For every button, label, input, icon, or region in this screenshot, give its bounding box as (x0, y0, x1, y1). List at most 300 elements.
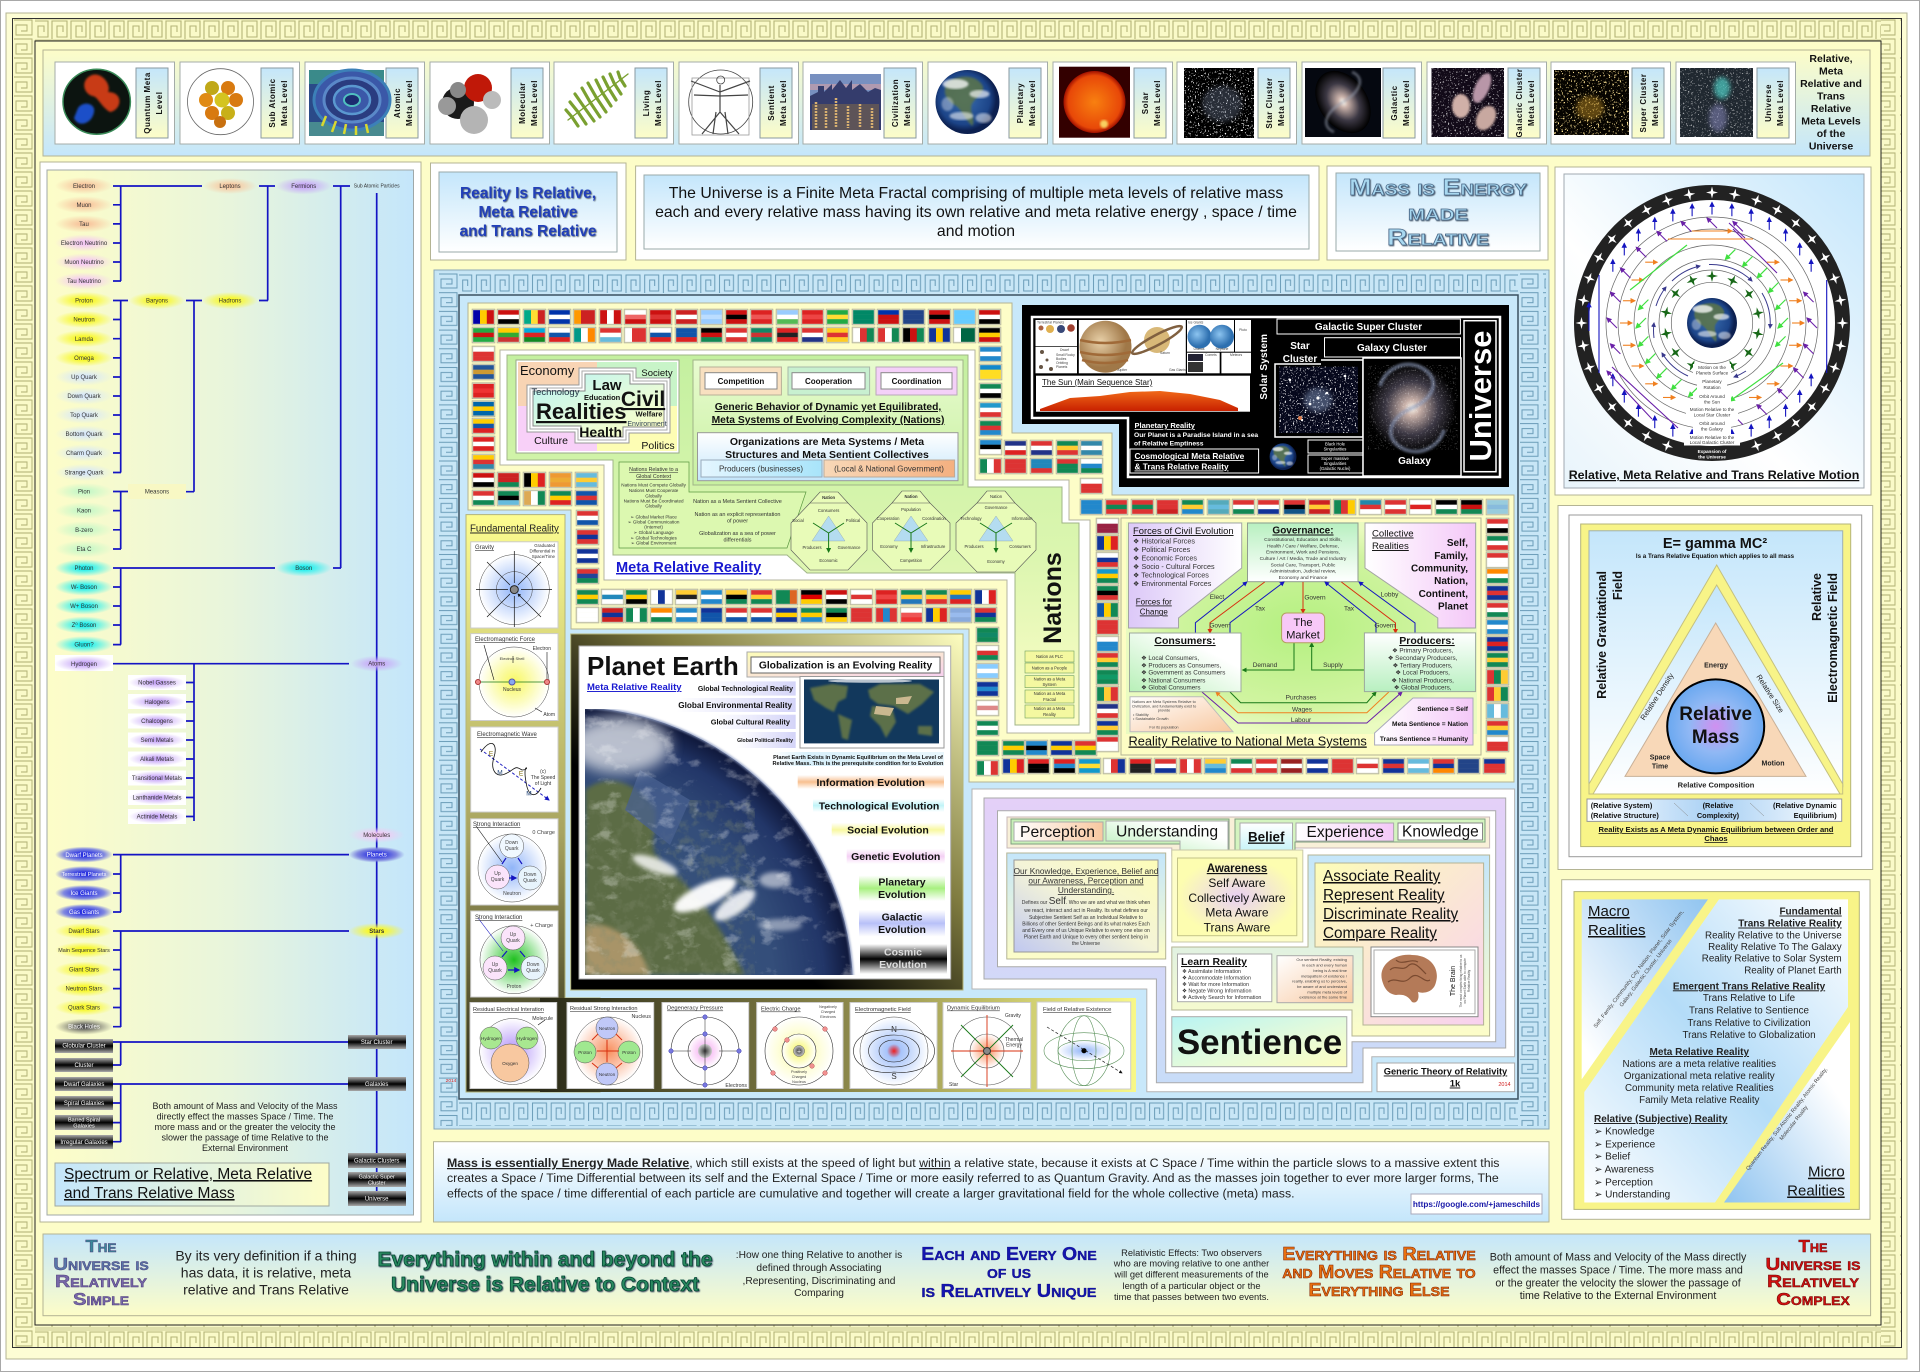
icon: city (810, 74, 881, 130)
column of flags: market left (1096, 518, 1119, 752)
relative mass circle: Relative (1679, 704, 1752, 725)
card: residual electrical interaction: Hydrogen (481, 1036, 501, 1041)
meta level label text: Super Cluster (1639, 74, 1648, 132)
nation meaning boxes: Nation as a Meta (1034, 706, 1066, 711)
subjective reality list: ➢ Experience (1594, 1139, 1656, 1150)
macro heading (1588, 903, 1646, 939)
clusters and galaxies (55, 1035, 406, 1206)
nations in global context note: Nations Must Cooperate (629, 488, 679, 493)
meta relative reality link: Meta Relative Reality (587, 682, 682, 693)
relatively simple: Universe is (53, 1254, 149, 1274)
bosons column (55, 560, 113, 653)
planet labels: Bodies (1056, 357, 1067, 361)
awareness panel: Self Aware (1208, 876, 1266, 890)
fundamental realities (1702, 906, 1842, 976)
market arrow labels: Tax (1344, 606, 1355, 612)
evolution bars: Evolution (878, 924, 926, 936)
motion ring labels: Expansion of (1698, 449, 1727, 454)
bosons column: Photon (74, 566, 94, 572)
hadrons column: Lamda (75, 337, 94, 343)
nation octagon three: Governance (985, 505, 1008, 510)
particle family nodes: Measons (145, 490, 169, 496)
relatively simple: Relatively (55, 1271, 147, 1291)
subjective reality list: ➢ Awareness (1594, 1165, 1654, 1176)
governance box: Health / Care / Welfare, Defense, (1267, 544, 1339, 550)
self definition panel: we react, interact and act in Reality. Its what defines our (1024, 908, 1148, 914)
icon: galaxy (1304, 60, 1382, 144)
meta relative realities: Family Meta relative Reality (1639, 1095, 1760, 1106)
leptons column: Muon Neutrino (64, 260, 104, 266)
bosons column: W- Boson (71, 585, 97, 591)
panel: mass is energy (1327, 166, 1548, 260)
card: electromagnetic force: Atom (543, 712, 555, 718)
relatively complex: Relatively (1767, 1271, 1859, 1291)
fundamental reality panel (446, 515, 1136, 1092)
market arrow labels: Demand (1253, 662, 1278, 669)
evolution bars: Social Evolution (847, 824, 929, 836)
consumers box: ❖ National Consumers (1141, 677, 1205, 684)
meta level label text: Planetary (1016, 83, 1025, 123)
meta level label text: Meta Level (405, 80, 414, 126)
bosons column: Gluon? (74, 643, 94, 649)
competition cooperation coordination: Cooperation (805, 377, 852, 386)
brain card: The most complex thing relative to us (1459, 954, 1463, 1007)
planet labels: Small Rocky (1056, 353, 1075, 357)
perception row: Knowledge (1402, 824, 1479, 840)
associate reality box (1315, 863, 1484, 1025)
associate reality box: Discriminate Reality (1323, 906, 1459, 923)
brain card: on Planet Earth able to compute (1463, 958, 1467, 1004)
collective realities (1365, 523, 1476, 628)
nation octagon one: Nation (822, 495, 836, 500)
evolution bars: Cosmic (884, 946, 922, 958)
perception row: Experience (1306, 824, 1384, 841)
realities word cloud: Technology (531, 387, 580, 398)
perception row (1007, 817, 1490, 856)
icon: earth at centre (1687, 298, 1737, 348)
card: electromagnetic wave: of Light (535, 781, 552, 787)
hadrons column: Top Quark (70, 413, 99, 419)
realities word cloud: Welfare (636, 410, 662, 418)
generic theory credit: 1k (1450, 1078, 1461, 1090)
generic theory credit (1377, 1063, 1515, 1092)
clusters and galaxies: Galaxies (73, 1124, 95, 1130)
relatively complex: The (1798, 1236, 1828, 1256)
organizations box: Producers (businesses) (719, 464, 803, 474)
hadrons column: Bottom Quark (65, 432, 104, 438)
strip title: Meta (1819, 66, 1843, 78)
nations in global context note: Globally (645, 504, 663, 509)
subjective reality list: ➢ Knowledge (1594, 1126, 1655, 1138)
icon: galactic cluster (1432, 68, 1504, 137)
subjective reality list: ➢ Understanding (1594, 1190, 1670, 1201)
competition cooperation coordination (700, 367, 957, 395)
motion ring labels (1690, 365, 1735, 460)
clusters and galaxies: Globular Cluster (62, 1044, 106, 1050)
card: dynamic equilibrium: Star (949, 1082, 959, 1088)
solar system label: Solar System (1259, 334, 1270, 400)
panel: mass is energy: made (1408, 199, 1468, 225)
organizations box: Structures and Meta Sentient Collectives (725, 449, 929, 461)
note: mass and velocity: slower the passage of time Relative to the (161, 1132, 329, 1142)
hadrons column: Charm Quark (66, 451, 103, 457)
market arrow labels: Supply (1323, 662, 1344, 669)
unique statement (921, 1244, 1097, 1301)
icon: atomic ripples (309, 70, 390, 136)
card: electromagnetic wave: The Speed (531, 775, 555, 781)
particle family nodes: Leptons (219, 184, 241, 190)
galaxy cluster box (1324, 338, 1460, 357)
generic theory credit: 2014 (1498, 1082, 1511, 1088)
panel: universe statement: and motion (937, 223, 1015, 240)
realities word cloud: Economy (520, 363, 575, 378)
column of flags: left (472, 346, 598, 506)
card: electromagnetic wave: Electromagnetic Wave (477, 732, 537, 738)
card: dynamic equilibrium (943, 1002, 1031, 1088)
card: strong interaction neutron: Quark (491, 877, 505, 883)
cosmological box: & Trans Relative Reality (1134, 462, 1229, 472)
panel: mass is energy: Relative (1387, 224, 1489, 250)
card: electromagnetic force: Electron (533, 646, 551, 652)
nations in global context note: ➢ Global Language (634, 530, 674, 535)
planet labels: Comets (1205, 353, 1217, 357)
fundamental reality title: Fundamental Reality (470, 524, 559, 534)
planet labels: Planets (1056, 365, 1068, 369)
fundamental realities: Trans Relative Reality (1738, 918, 1842, 930)
planets (1038, 321, 1234, 373)
leptons column: Tau Neutrino (67, 279, 102, 285)
motion ring labels: Local Galactic Cluster (1690, 440, 1735, 445)
collective realities: Self, (1447, 538, 1468, 549)
national meta systems title: Reality Relative to National Meta Systems (1128, 734, 1367, 748)
nation octagon three: Technology (960, 516, 982, 521)
card: electric charge (757, 1002, 843, 1088)
icon: super cluster (1554, 70, 1629, 135)
card: residual strong interaction: Neutron (599, 1026, 616, 1031)
fundamental realities: Reality Relative to the Universe (1705, 930, 1842, 942)
collective realities: Realities (1372, 541, 1409, 552)
self definition panel: Subjective Sentient Self as an Individual Relative to (1029, 915, 1143, 921)
note: mass and velocity: External Environment (202, 1143, 289, 1153)
card: field of relative existence (1037, 1002, 1131, 1089)
everything relative statement: and Moves Relative to (1282, 1262, 1476, 1282)
mass velocity text: time Relative to the External Environment (1520, 1290, 1716, 1302)
complexity bar: (Relative System) (1591, 801, 1653, 810)
clusters and galaxies: Spiral Galaxies (64, 1101, 104, 1107)
card: strong interaction proton: Up (492, 962, 498, 968)
nations in global context note: Nation as an explicit representation (695, 512, 780, 518)
triangle labels: Time (1652, 764, 1668, 770)
stars column: Dwarf Stars (68, 929, 100, 935)
note: mass and velocity: directly effect the masses Space / Time. The (157, 1112, 333, 1122)
awareness panel: Awareness (1207, 863, 1267, 875)
nation octagon two: Coordination (922, 516, 947, 521)
generic behavior caption: Meta Systems of Evolving Complexity (Nations) (712, 415, 944, 426)
governance box: Social Care, Transport, Public (1271, 562, 1336, 568)
leptons column: Electron (73, 184, 95, 190)
realities word cloud (516, 360, 679, 453)
nation meaning boxes: Nation as PLC (1036, 654, 1063, 659)
note: mass and velocity: Both amount of Mass and Velocity of the Mass (152, 1101, 338, 1111)
hydrogen node: Hydrogen (71, 662, 97, 668)
meta level label text: Meta Level (654, 80, 663, 126)
icon: quantum (63, 69, 130, 134)
planet earth note: Planet Earth Exists in Dynamic Equilibrium on the Meta Level of (773, 755, 943, 761)
panel: energy equation triangle (1558, 506, 1873, 870)
collective realities: Collective (1372, 528, 1414, 540)
global reality bars: Global Political Reality (737, 738, 793, 744)
card: degeneracy pressure: Electrons (725, 1083, 747, 1089)
nation meaning boxes (1025, 651, 1074, 718)
definition text: By its very definition if a thing (175, 1248, 357, 1264)
link box (1411, 1194, 1542, 1214)
associating text: defined through Associating (756, 1263, 882, 1274)
relativistic effects text: will get different measurements of the (1113, 1270, 1269, 1280)
complexity bar: Complexity) (1697, 811, 1740, 820)
column of flags: lower inner (976, 627, 1097, 776)
nations in global context note: Globalization as a sea of power (699, 531, 776, 537)
relatively simple: The (86, 1236, 116, 1256)
meta level label text: Star Cluster (1265, 77, 1274, 129)
particle family nodes (128, 178, 403, 672)
self definition panel: Planet Earth and Unique to every other sentient being in (1024, 934, 1148, 940)
clusters and galaxies: Dwarf Galaxies (64, 1082, 104, 1088)
panel: universe statement: The Universe is a Finite Meta Fractal comprising of multiple meta levels of relative mass (669, 185, 1283, 202)
card: electromagnetic force (471, 634, 558, 720)
fundamental realities: Reality Relative to Solar System (1702, 954, 1842, 964)
nations in global context note: ➢ Global Environment (631, 541, 677, 546)
panel: mass explanation: creates a Space / Time Differential between its self and the External Space / Time or more easily referred to as Quantum Gravity. And as the masses join together to ever more larger forms, The (447, 1171, 1499, 1185)
competition cooperation coordination: Coordination (892, 377, 941, 386)
motion ring labels: Motion Relative to the (1690, 407, 1735, 412)
the sun (1040, 378, 1238, 411)
definition text: has data, it is relative, meta (181, 1264, 351, 1280)
planet labels: Dwarf (1060, 348, 1069, 352)
leptons column (55, 177, 113, 290)
governance box: Culture / Art / Media, Trade and Industry (1260, 556, 1347, 562)
nations in global context note: ➢ Global Technologies (630, 535, 678, 540)
learn reality box: ❖ Negate Wrong Information (1182, 988, 1251, 994)
complexity bar: Equilibrium) (1794, 811, 1837, 820)
panel: mass explanation: effects of the space / time differential of each particle are cumulative and together will create a larger gravitational field for the whole collective (meta) mass. (447, 1186, 1295, 1200)
strip title: Meta Levels (1801, 116, 1861, 128)
hadrons column: Strange Quark (64, 470, 105, 476)
sentient reality note: being is A real time (1313, 968, 1348, 973)
realities word cloud: Law (592, 377, 622, 394)
card: residual strong interaction: Neutron (599, 1072, 616, 1077)
market arrow labels: Tax (1255, 606, 1266, 612)
card: electromagnetic wave: M (497, 770, 503, 776)
hadrons column: Omega (74, 356, 94, 362)
nations in global context note: differentials (723, 537, 752, 543)
card: electromagnetic field: N (891, 1025, 897, 1034)
field labels (1595, 571, 1840, 703)
card: residual electrical interaction: Oxygen (502, 1061, 518, 1066)
galaxy image: Galaxy (1398, 456, 1431, 467)
sentience note: Sentience = Self (1417, 706, 1469, 713)
macro scale list: Galaxy, Galactic Cluster, Universe (1619, 938, 1674, 1008)
sentience lilac band (984, 798, 1506, 1083)
evolution bars: Evolution (879, 959, 927, 971)
note: mass and velocity: more mass and or the greater the velocity the (154, 1122, 336, 1132)
card: strong interaction proton (471, 911, 558, 997)
panel: macro and micro realities (1562, 880, 1870, 1219)
relatively complex (1766, 1236, 1860, 1309)
producers box: ❖ Secondary Producers, (1388, 655, 1458, 662)
collective realities: Planet (1438, 602, 1469, 612)
meta level label text: Civilization (891, 79, 900, 127)
tree connector lines (113, 186, 377, 1198)
panel: mass explanation: Mass is essentially Energy Made Relative, which still exists at the speed of light but within a relative state, because it exists at C Space / Time within the particle slows to a massive extent this (447, 1156, 1499, 1170)
universe expansion stars (1576, 186, 1848, 453)
card: degeneracy pressure: Degeneracy Pressure (667, 1006, 723, 1012)
galaxy cluster box: Galaxy Cluster (1357, 343, 1427, 354)
panel: planet earth (570, 634, 964, 990)
panel: reality is relative: Meta Relative (478, 204, 578, 221)
atom groups: Transitional Metals (132, 776, 182, 782)
subjective reality list (1594, 1114, 1728, 1201)
card: residual strong interaction: Residual Strong Interaction (570, 1006, 637, 1012)
spectrum title box: and Trans Relative Mass (64, 1185, 235, 1202)
definition text: relative and Trans Relative (183, 1282, 349, 1298)
unique statement: of us (987, 1262, 1031, 1282)
relativistic effects text: length of a particular object or the (1122, 1281, 1260, 1291)
meta level label text: Meta Level (1028, 80, 1037, 126)
forces of civil evolution: Forces for (1136, 598, 1172, 606)
hadrons column: Down Quark (67, 394, 102, 400)
strip title: Relative and (1800, 78, 1862, 90)
star cluster box: Cluster (1283, 354, 1317, 365)
planet labels: Pluto (1239, 328, 1247, 332)
planet labels (1037, 320, 1247, 372)
generic behavior caption (712, 402, 944, 426)
card: strong interaction neutron: Quark (505, 846, 519, 852)
motion ring labels: the Sun (1704, 400, 1720, 404)
realities word cloud: Education (584, 393, 621, 402)
perception row: Belief (1248, 830, 1285, 844)
panel: reality is relative: Reality Is Relative, (460, 185, 596, 202)
card: electromagnetic wave (471, 727, 558, 812)
motion ring label backing (1684, 364, 1740, 446)
sentience outer white frame (972, 789, 1515, 1092)
brain card: The Brain (1450, 966, 1457, 996)
flags zone background (468, 303, 1514, 782)
card: strong interaction neutron: Strong Interaction (473, 822, 520, 828)
learn reality box: Learn Reality (1181, 956, 1247, 968)
unique statement: Each and Every One (921, 1244, 1097, 1264)
stars column: Quark Stars (68, 1006, 100, 1012)
black hole boxes: Singularities (1324, 461, 1346, 466)
governance box: Constitutional, Education and Skills, (1264, 537, 1342, 543)
field labels: Field (1611, 571, 1625, 600)
panel: universe (1022, 305, 1509, 487)
meta relative realities: Nations are a meta relative realities (1623, 1059, 1776, 1070)
associate reality box: Compare Reality (1323, 925, 1437, 942)
awareness panel (1172, 850, 1303, 942)
self definition panel: Our Knowledge, Experience, Belief and (1014, 866, 1159, 876)
galaxy image (1363, 358, 1461, 476)
producers box: ❖ Primary Producers, (1392, 648, 1453, 654)
sentient reality note: Our sentient Reality, existing (1296, 957, 1347, 962)
meta level label text: Meta Level (779, 80, 788, 126)
nation octagon one (791, 492, 867, 570)
realities word cloud: Environment (627, 421, 667, 428)
fundamental realities: Reality of Planet Earth (1744, 966, 1842, 976)
row of flags: top (472, 309, 1001, 343)
planets column: Ice Giants (70, 891, 98, 897)
panel: mass is energy: Mass is Energy (1349, 174, 1527, 200)
producers box: Producers: (1399, 635, 1455, 647)
black hole boxes: Singularities (1324, 446, 1346, 452)
nation octagon two: Infrastructure (921, 544, 946, 549)
global reality bars (677, 681, 796, 748)
stars column: Black Holes (68, 1025, 100, 1031)
meta level label text: Quantum Meta (143, 72, 152, 134)
unique statement: is Relatively Unique (922, 1281, 1097, 1301)
clusters and galaxies: Irregular Galaxies (60, 1140, 108, 1146)
cosmological box (1130, 449, 1259, 473)
relative mass circle: Mass (1692, 727, 1739, 748)
mass velocity text: or the greater the velocity the slower the passage of (1495, 1278, 1741, 1290)
evolution bars: Genetic Evolution (851, 851, 940, 863)
card: strong interaction proton: Quark (506, 938, 520, 944)
fundamental realities: Fundamental (1779, 906, 1842, 918)
card: dynamic equilibrium: Thermal (1005, 1037, 1023, 1043)
motion ring labels: the Universe (1698, 454, 1726, 460)
panel: bottom statements (43, 1234, 1871, 1316)
hadrons column: Up Quark (71, 375, 98, 381)
equilibrium caption: Reality Exists as A Meta Dynamic Equilibrium between Order and (1599, 825, 1834, 834)
relatively complex: Universe is (1766, 1254, 1860, 1274)
meta level label text: Universe (1764, 84, 1773, 122)
black hole boxes: (Galactic Nuclei) (1320, 466, 1351, 471)
emergent realities (1673, 981, 1826, 1041)
card: dynamic equilibrium: Dynamic Equilibrium (947, 1006, 1000, 1012)
consumers box: ❖ Producers as Consumers, (1141, 662, 1221, 670)
icon: earth (936, 70, 1000, 134)
outer yellow triangle (1589, 565, 1843, 794)
relativistic effects text: Relativistic Effects: Two observers (1121, 1248, 1262, 1258)
panel: national meta systems market (1121, 518, 1481, 755)
clusters and galaxies: Universe (365, 1196, 389, 1202)
hadrons column: Kaon (77, 509, 91, 515)
panel: universe statement (636, 166, 1319, 260)
leptons column: Muon (76, 203, 92, 209)
complexity bar: (Relative (1703, 801, 1733, 810)
row of flags: bottom (1002, 758, 1506, 774)
nations note: Nations are Meta Systems Relative to (1132, 700, 1196, 704)
galaxy orbit arrows (1607, 218, 1817, 428)
planets column: Dwarf Planets (65, 853, 103, 859)
particle family nodes: Atoms (368, 662, 385, 668)
planet labels: Terrestrial Planets (1037, 320, 1064, 324)
market arrow labels (1209, 592, 1399, 724)
atom groups: Nobel Gasses (138, 680, 176, 686)
card: strong interaction proton: Quark (488, 968, 502, 974)
atom groups: Chalcogens (141, 719, 173, 725)
meta level label text: Living (642, 90, 651, 116)
motion ring labels: Local Star Cluster (1694, 412, 1731, 418)
card: gravity: Graduated (534, 543, 556, 548)
icon: molecule (438, 74, 501, 134)
everything relative statement (1282, 1244, 1476, 1300)
market arrow labels: Labour (1291, 717, 1312, 724)
panel: relative motion (1555, 167, 1871, 495)
meta level cards (55, 62, 1796, 144)
card: electromagnetic wave: M (526, 790, 532, 798)
reality verbs panel (1172, 855, 1490, 1036)
cosmological box: Cosmological Meta Relative (1134, 451, 1245, 461)
